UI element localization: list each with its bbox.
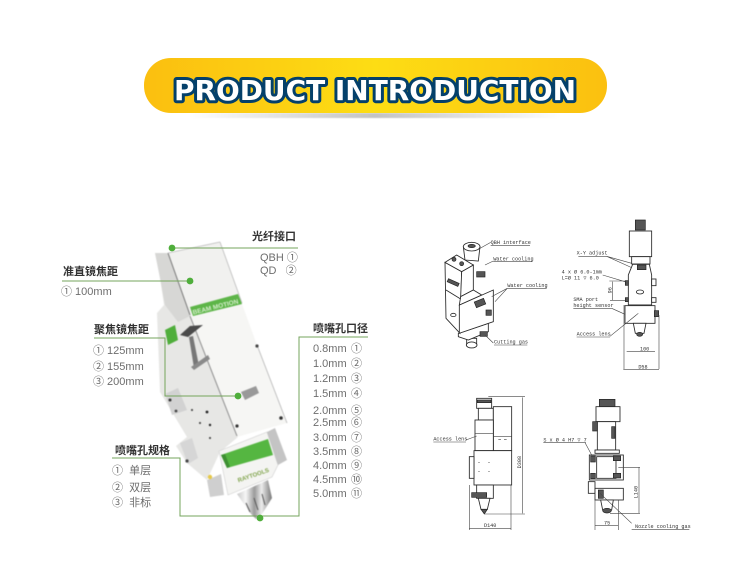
callout: nozzle bore diameter: ④: [351, 387, 362, 400]
diagram: rear view: S x Ø 4 H7 ▽ 7: [543, 436, 587, 443]
callout: focusing focal length: ③ 200mm: [93, 375, 144, 388]
callout: collimating focal length: 准直镜焦距: [63, 264, 118, 278]
brand label: BEAM MOTION: [192, 298, 240, 317]
callout: nozzle bore diameter: 5.0mm: [313, 488, 347, 500]
callout: nozzle bore diameter: 4.0mm: [313, 460, 347, 472]
callout: nozzle bore diameter: ②: [351, 357, 362, 370]
diagram: front view: 100: [640, 347, 649, 353]
callout: nozzle bore diameter: ①: [351, 342, 362, 355]
callout: focusing focal length: [93, 322, 241, 399]
lower head box: [219, 432, 278, 495]
diagram: front view: L=Ø 11 ▽ 6.0: [562, 274, 599, 281]
rear housing: [155, 253, 238, 480]
diagram: side view: [433, 397, 525, 530]
callout: nozzle bore diameter: 3.5mm: [313, 446, 347, 458]
banner pill: [144, 58, 607, 113]
callout: focusing focal length: 聚焦镜焦距: [94, 322, 149, 336]
diagram: front view: 4 x Ø 6.0-1mm: [562, 269, 602, 276]
dark bracket: [180, 325, 203, 337]
callout: nozzle bore diameter: 喷嘴孔口径: [313, 322, 368, 335]
green side patch: [165, 325, 178, 345]
callout: focusing focal length: ② 155mm: [93, 360, 144, 373]
diagram: isometric view: Water cooling: [493, 256, 534, 262]
diagram: rear view: Nozzle cooling gas: [635, 524, 691, 530]
product photo: laser cutting head: [155, 242, 287, 519]
diagram: side view: Access lens: [433, 437, 467, 443]
diagram: isometric view: Water cooling: [507, 283, 548, 289]
callout: nozzle bore diameter: 1.5mm: [313, 388, 347, 400]
nozzle assembly: [237, 480, 272, 519]
callout: nozzle bore diameter: 1.0mm: [313, 358, 347, 370]
green brand band: [190, 294, 242, 316]
callout: nozzle type: ③ 非标: [112, 495, 151, 509]
callout: collimating focal length: [61, 264, 193, 298]
diagram: front view: Access lens: [577, 332, 611, 338]
callout: nozzle type: [112, 443, 170, 509]
upper left face: [155, 253, 190, 322]
diagram: front view: SMA port: [573, 297, 598, 303]
diagram: front view: height sensor: [573, 303, 614, 309]
callout: nozzle bore diameter: [112, 322, 368, 521]
callout: nozzle type: ② 双层: [112, 481, 151, 494]
diagram: isometric view: [445, 240, 548, 348]
head brand label: RAYTOOLS: [237, 468, 270, 484]
main body: [190, 304, 287, 437]
callout: nozzle bore diameter: ⑧: [351, 445, 362, 458]
side bracket: [165, 388, 187, 415]
title banner: [144, 58, 607, 118]
diagram: side view: D140: [484, 523, 496, 529]
callout: nozzle type: ① 单层: [112, 464, 151, 477]
callout: fiber interface: QBH ①: [260, 251, 298, 264]
callout: nozzle bore diameter: 0.8mm: [313, 343, 347, 355]
callout: nozzle bore diameter: ⑩: [351, 473, 362, 486]
diagram: front view: X-Y adjust: [577, 251, 608, 257]
diagram: side view: D308: [517, 456, 523, 468]
adjusting window: [241, 386, 259, 400]
callout: nozzle bore diameter: 1.2mm: [313, 373, 347, 385]
title: PRODUCT INTRODUCTION: [174, 74, 576, 107]
callout: nozzle bore diameter: ⑪: [351, 487, 362, 500]
diagram: front view: [562, 220, 659, 370]
callout: nozzle bore diameter: 2.0mm: [313, 405, 347, 417]
diagram: rear view: [543, 399, 691, 530]
callout: nozzle bore diameter: ⑦: [351, 431, 362, 444]
callout: nozzle bore diameter: ⑥: [351, 416, 362, 429]
diagram: isometric view: QBH interface: [491, 240, 531, 246]
banner shadow: [190, 113, 560, 118]
diagram: front view: D58: [638, 364, 648, 370]
callout: fiber interface: [169, 229, 298, 277]
callout: nozzle bore diameter: ⑤: [351, 404, 362, 417]
callout: nozzle bore diameter: ⑨: [351, 459, 362, 472]
upper right face: [168, 242, 242, 315]
callout: collimating focal length: ① 100mm: [61, 285, 112, 298]
callout: focusing focal length: ① 125mm: [93, 344, 144, 357]
callout: fiber interface: 光纤接口: [252, 229, 296, 243]
callout: fiber interface: QD ②: [260, 264, 297, 277]
callout: nozzle bore diameter: ③: [351, 372, 362, 385]
callout: nozzle type: 喷嘴孔规格: [115, 443, 170, 457]
diagram: rear view: 75: [604, 521, 610, 527]
callout: nozzle bore diameter: 2.5mm: [313, 417, 347, 429]
diagram: rear view: L140: [633, 486, 639, 498]
callout: nozzle bore diameter: 4.5mm: [313, 474, 347, 486]
callout: nozzle bore diameter: 3.0mm: [313, 432, 347, 444]
diagram: isometric view: Cutting gas: [494, 340, 528, 346]
diagram: front view: 96: [608, 287, 614, 293]
